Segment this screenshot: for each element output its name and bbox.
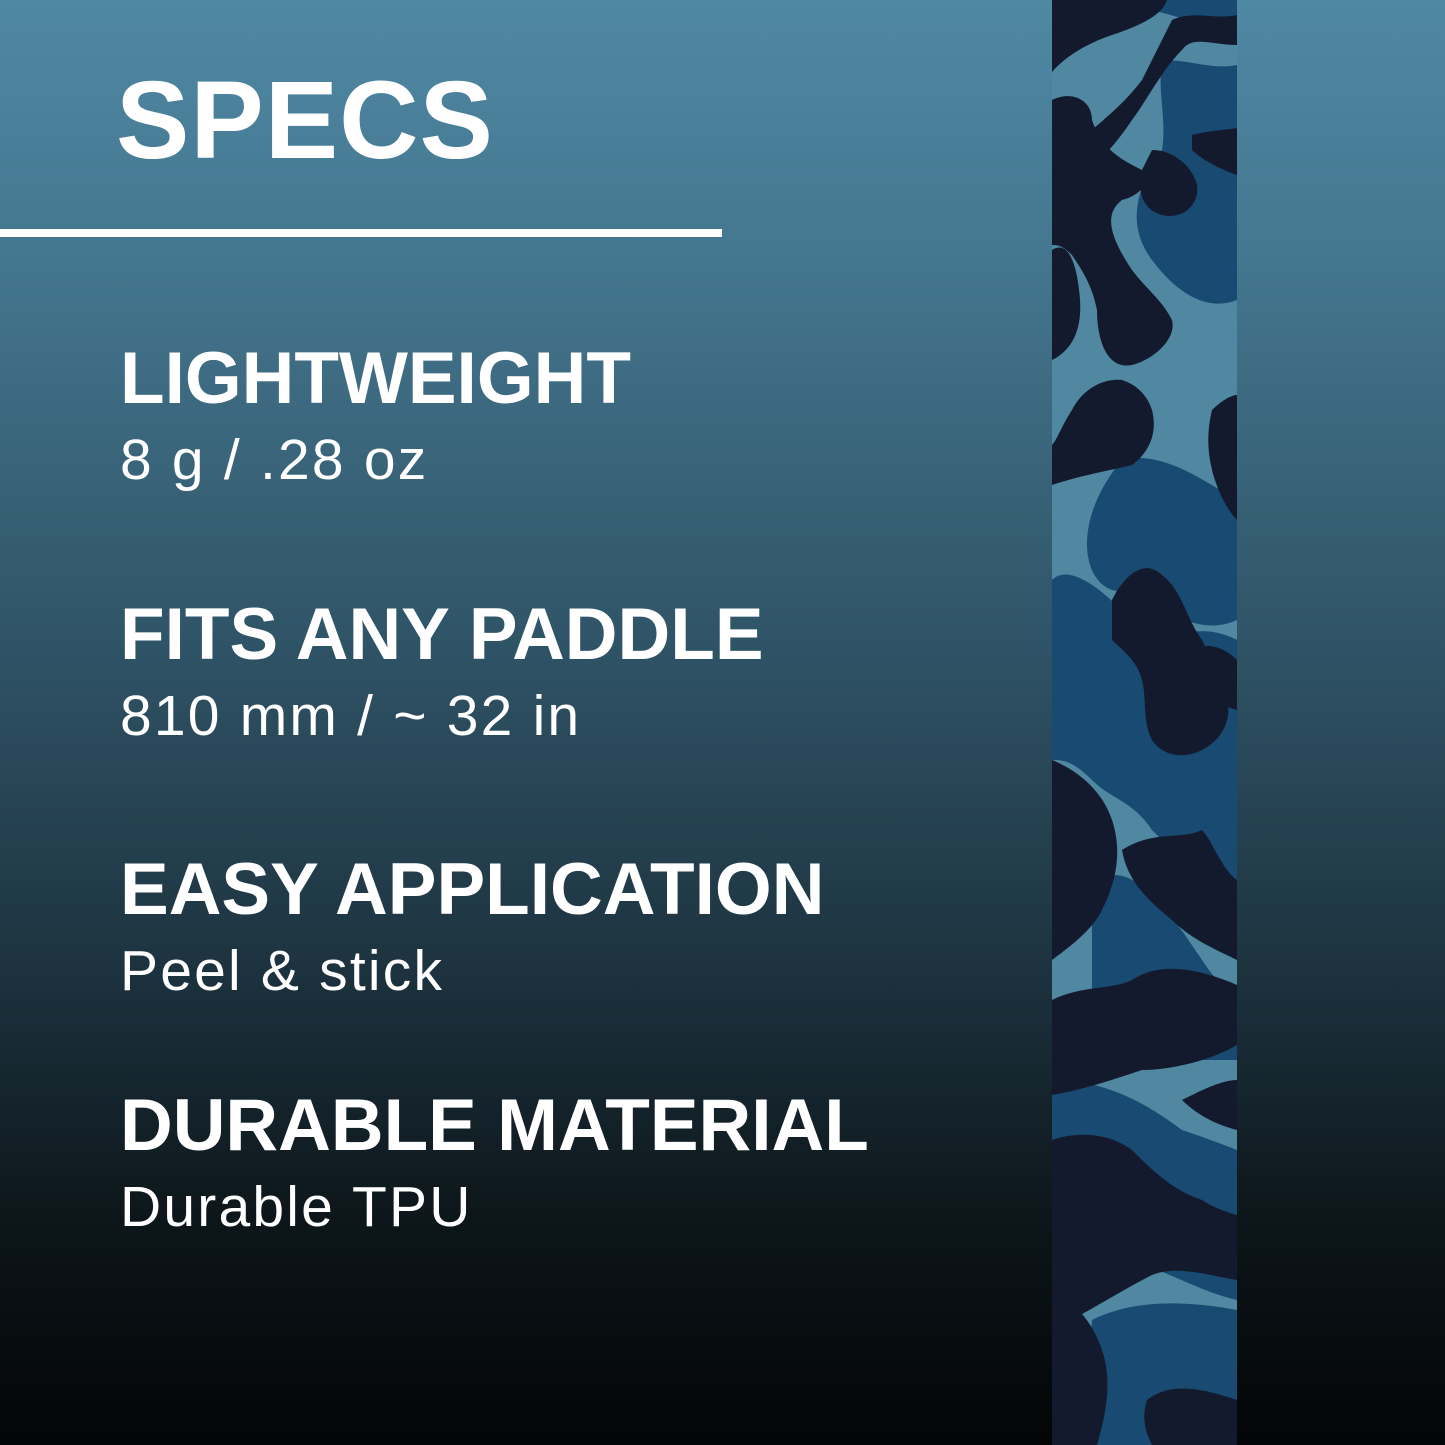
spec: fits any paddle: 810 mm / ~ 32 in — [120, 684, 581, 748]
spec: easy application — [120, 849, 824, 1003]
spec: lightweight — [120, 338, 631, 492]
title: SPECS — [116, 59, 494, 182]
spec: lightweight: LIGHTWEIGHT — [120, 338, 631, 419]
spec: durable material — [120, 1085, 869, 1239]
spec: durable material: Durable TPU — [120, 1175, 473, 1239]
spec: easy application: Peel & stick — [120, 939, 444, 1003]
spec: fits any paddle — [120, 594, 764, 748]
camo strip — [1052, 0, 1237, 1445]
spec: fits any paddle: FITS ANY PADDLE — [120, 594, 764, 675]
title underline — [0, 229, 722, 237]
spec: easy application: EASY APPLICATION — [120, 849, 824, 930]
spec: lightweight: 8 g / .28 oz — [120, 428, 428, 492]
spec: durable material: DURABLE MATERIAL — [120, 1085, 869, 1166]
